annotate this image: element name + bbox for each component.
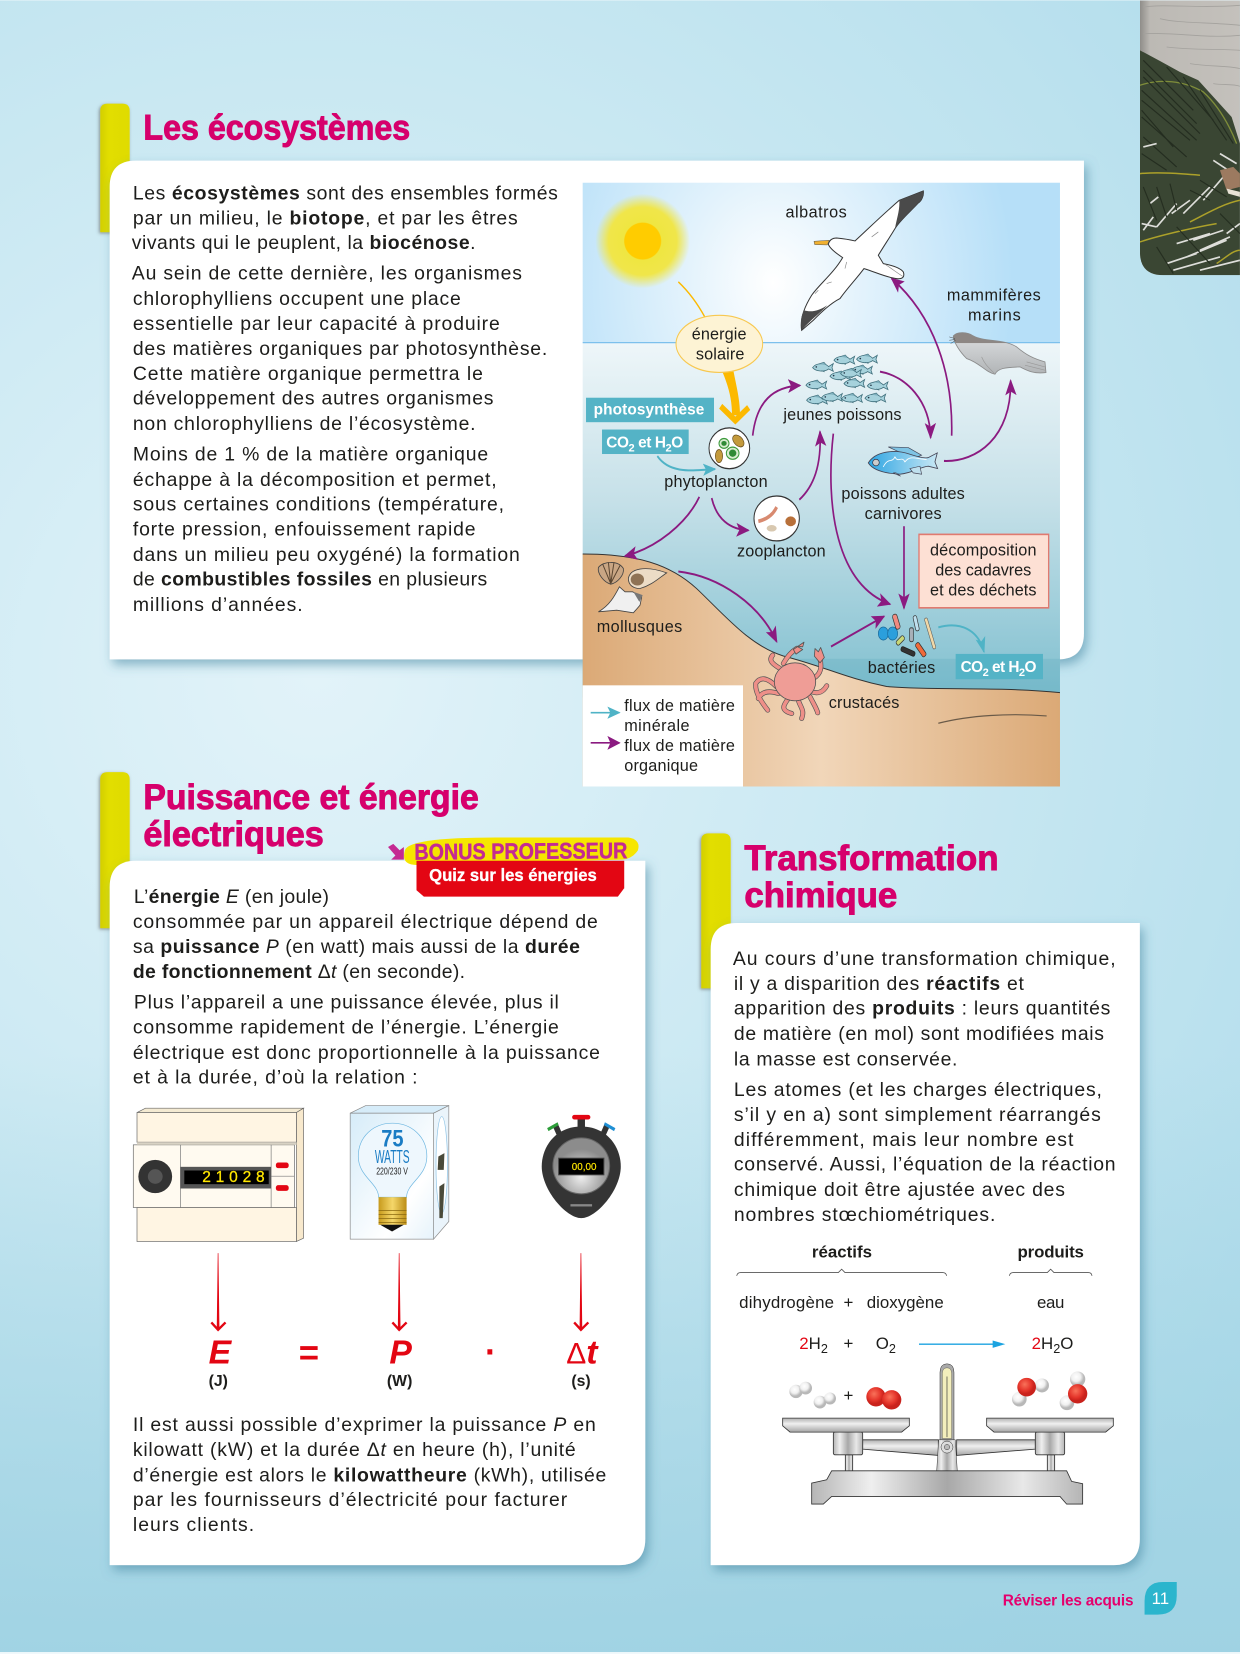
text block: énergie intro: consommée par un appareil électrique dépend de bbox=[133, 911, 598, 933]
heading: Transformation chimique bbox=[744, 840, 999, 915]
text block: écosystèmes: échappe à la décomposition et permet, bbox=[133, 469, 497, 491]
equation labels: 2H bbox=[1032, 1334, 1053, 1353]
illustration: compteur électrique bbox=[133, 1108, 304, 1241]
illustration: poisson adulte bbox=[868, 447, 938, 476]
panel: écosystèmes card bbox=[110, 161, 1084, 659]
text block: énergie intro bbox=[133, 886, 600, 1089]
equation labels: réactifs bbox=[812, 1243, 872, 1262]
footer: Réviser les acquis: Réviser les acquis bbox=[1003, 1593, 1134, 1610]
equation labels: 2 bbox=[821, 1342, 828, 1356]
panel: puissance card bbox=[110, 861, 645, 1565]
equation labels: + bbox=[843, 1386, 853, 1405]
equation labels: + bbox=[843, 1293, 853, 1312]
units: (J) bbox=[209, 1373, 228, 1390]
diagram labels: marins bbox=[968, 306, 1021, 324]
equation labels: dioxygène bbox=[867, 1293, 944, 1312]
formula: E = P · Δt: t bbox=[586, 1334, 599, 1372]
text block: énergie intro: Plus l’appareil a une puissance élevée, plus il bbox=[134, 991, 559, 1013]
illustration: balance et molécules bbox=[737, 1269, 1113, 1504]
text block: transformation: nombres stœchiométriques. bbox=[734, 1204, 995, 1226]
diagram labels: albatros bbox=[786, 204, 847, 222]
text block: écosystèmes: Les écosystèmes sont des ensembles formés bbox=[133, 183, 558, 205]
diagram labels: organique bbox=[624, 757, 698, 775]
diagram labels: CO bbox=[606, 434, 629, 451]
text block: énergie intro: électrique est donc proportionnelle à la puissance bbox=[133, 1042, 600, 1064]
text block: transformation: Les atomes (et les charges électriques, bbox=[734, 1079, 1102, 1101]
diagram labels: flux de matière bbox=[624, 697, 735, 715]
diagram labels: et des déchets bbox=[930, 582, 1036, 600]
heading: Puissance et énergie électriques bbox=[143, 779, 479, 854]
illustration: jeunes poissons bbox=[806, 354, 888, 405]
text block: écosystèmes: Moins de 1 % de la matière organique bbox=[133, 444, 488, 466]
text block: écosystèmes: dans un milieu peu oxygéné) la formation bbox=[133, 544, 520, 566]
heading tab: puissance bbox=[100, 772, 130, 928]
equation labels bbox=[739, 1243, 1084, 1405]
photo: palm tree corner bbox=[1140, 0, 1240, 275]
diagram labels: 2 bbox=[629, 443, 635, 455]
illustration: chronomètre: 00,00 bbox=[572, 1162, 597, 1173]
text block: kilowattheure: leurs clients. bbox=[133, 1514, 254, 1536]
text block: kilowattheure bbox=[133, 1414, 606, 1536]
diagram labels: décomposition bbox=[930, 541, 1036, 559]
badge: bonus professeur: BONUS PROFESSEUR bbox=[414, 837, 627, 865]
formula: E = P · Δt: E bbox=[209, 1334, 233, 1372]
diagram labels: mollusques bbox=[597, 618, 682, 636]
text block: écosystèmes bbox=[132, 183, 558, 616]
equation labels: eau bbox=[1037, 1293, 1064, 1312]
text block: transformation: chimique doit être ajustée avec des bbox=[734, 1179, 1065, 1201]
diagram scene bbox=[583, 183, 1060, 787]
formula: E = P · Δt: Δ bbox=[566, 1338, 586, 1371]
equation labels: 2H bbox=[799, 1334, 821, 1353]
diagram labels: flux de matière bbox=[624, 737, 735, 755]
text block: transformation: il y a disparition des réactifs et bbox=[734, 973, 1024, 995]
diagram labels: crustacés bbox=[829, 694, 899, 712]
text block: transformation: apparition des produits : leurs quantités bbox=[734, 998, 1110, 1020]
illustration: ampoule 75 watts: 75 bbox=[381, 1126, 404, 1152]
badge: bonus professeur bbox=[388, 837, 639, 897]
formula: E = P · Δt bbox=[209, 1334, 599, 1373]
badge: bonus professeur: Quiz sur les énergies bbox=[429, 865, 597, 885]
diagram labels: phytoplancton bbox=[664, 473, 768, 491]
diagram labels: et H bbox=[634, 434, 666, 451]
units: (W) bbox=[387, 1373, 412, 1390]
illustration: ampoule 75 watts: 220/230 V bbox=[376, 1167, 408, 1177]
panel: transformation card bbox=[711, 923, 1140, 1565]
equation labels: 2 bbox=[889, 1342, 896, 1356]
text block: écosystèmes: Au sein de cette dernière, les organismes bbox=[132, 263, 522, 285]
illustration: crabe bbox=[756, 642, 827, 718]
diagram labels: photosynthèse bbox=[594, 402, 705, 419]
text block: transformation: s’il y en a) sont simplement réarrangés bbox=[734, 1104, 1101, 1126]
units bbox=[209, 1373, 591, 1390]
diagram labels: jeunes poissons bbox=[782, 406, 902, 424]
lower background shading bbox=[0, 1055, 1240, 1654]
text block: kilowattheure: d’énergie est alors le kilowattheure (kWh), utilisée bbox=[133, 1464, 606, 1486]
diagram labels: 2 bbox=[666, 443, 672, 455]
diagram labels: O bbox=[1025, 659, 1037, 676]
equation labels: 2 bbox=[1053, 1342, 1060, 1356]
diagram labels: mammifères bbox=[947, 286, 1041, 304]
diagram labels: CO bbox=[961, 659, 983, 676]
heading tab: transformation bbox=[701, 833, 731, 988]
illustration: chronomètre bbox=[542, 1115, 621, 1218]
text block: écosystèmes: vivants qui le peuplent, la biocénose. bbox=[132, 232, 476, 254]
diagram labels: des cadavres bbox=[935, 562, 1031, 580]
text block: énergie intro: sa puissance P (en watt) mais aussi de la durée bbox=[133, 936, 580, 958]
diagram labels bbox=[594, 204, 1041, 775]
equation labels: O bbox=[876, 1334, 889, 1353]
text block: transformation: Au cours d’une transformation chimique, bbox=[733, 948, 1116, 970]
text block: transformation bbox=[733, 948, 1116, 1226]
text block: écosystèmes: de combustibles fossiles en plusieurs bbox=[133, 569, 487, 591]
diagram labels: et H bbox=[988, 659, 1019, 676]
heading tab: écosystèmes bbox=[100, 104, 130, 232]
heading: Transformation chimique: Transformation bbox=[744, 840, 999, 878]
bottom page edge bbox=[0, 1652, 1240, 1654]
text block: transformation: de matière (en mol) sont modifiées mais bbox=[734, 1023, 1104, 1045]
text block: transformation: conservé. Aussi, l’équation de la réaction bbox=[734, 1154, 1116, 1176]
text block: écosystèmes: non chlorophylliens de l’écosystème. bbox=[133, 413, 476, 435]
text block: énergie intro: L’énergie E (en joule) bbox=[134, 886, 329, 908]
text block: écosystèmes: chlorophylliens occupent une place bbox=[133, 288, 461, 310]
diagram: réseau trophique bbox=[583, 183, 1060, 787]
diagram labels: 2 bbox=[1019, 667, 1025, 679]
equation labels: produits bbox=[1018, 1243, 1084, 1262]
units: (s) bbox=[571, 1373, 591, 1390]
diagram labels: carnivores bbox=[865, 505, 942, 523]
illustration: albatros bbox=[801, 191, 923, 330]
text block: transformation: la masse est conservée. bbox=[734, 1048, 957, 1070]
text block: énergie intro: et à la durée, d’où la relation : bbox=[133, 1067, 418, 1089]
page number badge: 11 bbox=[1152, 1589, 1169, 1608]
text block: écosystèmes: Cette matière organique permettra le bbox=[133, 363, 483, 385]
text block: énergie intro: de fonctionnement Δt (en seconde). bbox=[133, 961, 465, 983]
illustration: phoque bbox=[949, 333, 1046, 374]
page number badge bbox=[1145, 1582, 1177, 1615]
heading: Transformation chimique: chimique bbox=[744, 877, 897, 915]
diagram labels: 2 bbox=[983, 667, 989, 679]
text block: transformation: différemment, mais leur nombre est bbox=[734, 1129, 1074, 1151]
heading: Les écosystèmes: Les écosystèmes bbox=[143, 110, 410, 148]
diagram labels: bactéries bbox=[868, 659, 935, 677]
text block: kilowattheure: kilowatt (kW) et la durée Δt en heure (h), l’unité bbox=[133, 1439, 576, 1461]
diagram labels: poissons adultes bbox=[841, 485, 965, 503]
diagram labels: énergie bbox=[692, 325, 747, 343]
illustration: ampoule 75 watts: WATTS bbox=[375, 1146, 410, 1167]
formula: E = P · Δt: = bbox=[299, 1335, 319, 1373]
text block: écosystèmes: par un milieu, le biotope, et par les êtres bbox=[133, 207, 518, 229]
formula: E = P · Δt: P bbox=[389, 1334, 412, 1372]
text block: écosystèmes: développement des autres organismes bbox=[133, 388, 493, 410]
formula: E = P · Δt: · bbox=[485, 1334, 497, 1372]
diagram labels: solaire bbox=[696, 345, 744, 363]
equation labels: O bbox=[1060, 1334, 1073, 1353]
diagram labels: O bbox=[671, 434, 683, 451]
equation labels: dihydrogène bbox=[739, 1293, 834, 1312]
text block: écosystèmes: millions d’années. bbox=[133, 594, 303, 616]
heading: Puissance et énergie électriques: électriques bbox=[143, 816, 324, 854]
text block: énergie intro: consomme rapidement de l’énergie. L’énergie bbox=[133, 1017, 559, 1039]
diagram labels: zooplancton bbox=[737, 543, 826, 561]
diagram labels: minérale bbox=[624, 717, 690, 735]
illustration: ampoule 75 watts bbox=[350, 1106, 449, 1239]
text block: écosystèmes: forte pression, enfouissement rapide bbox=[133, 518, 476, 540]
text block: écosystèmes: sous certaines conditions (température, bbox=[133, 494, 504, 516]
illustration: coquillages bbox=[598, 562, 667, 613]
text block: kilowattheure: par les fournisseurs d’électricité pour facturer bbox=[133, 1489, 568, 1511]
text block: kilowattheure: Il est aussi possible d’exprimer la puissance P en bbox=[133, 1414, 596, 1436]
illustration: compteur électrique: 2 1 0 2 8 bbox=[202, 1169, 265, 1186]
heading: Puissance et énergie électriques: Puissance et énergie bbox=[143, 779, 479, 817]
text block: écosystèmes: essentielle par leur capacité à produire bbox=[133, 313, 500, 335]
arrows: vers la formule bbox=[211, 1253, 588, 1330]
equation labels: + bbox=[843, 1334, 853, 1353]
text block: écosystèmes: des matières organiques par photosynthèse. bbox=[133, 338, 547, 360]
